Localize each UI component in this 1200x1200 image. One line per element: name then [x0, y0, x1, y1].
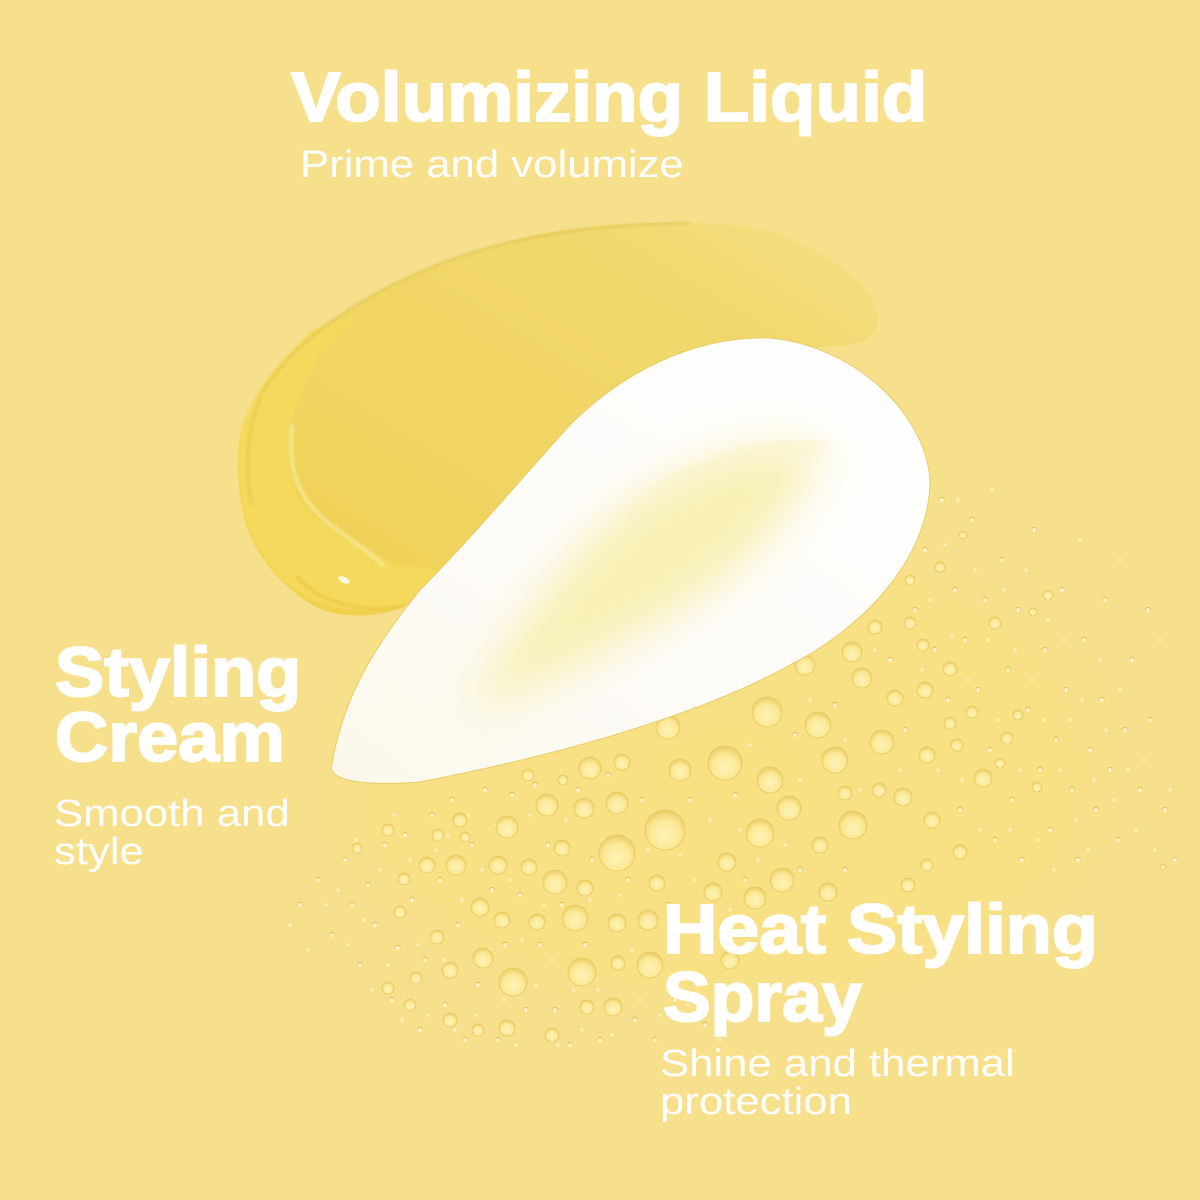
droplets [352, 531, 1166, 1042]
text: styling cream: style [54, 831, 144, 873]
swatch: styling cream [331, 338, 930, 783]
heading: styling cream: Styling [55, 633, 301, 711]
heading: styling cream [55, 633, 301, 776]
heading: heat styling spray: Spray [663, 958, 862, 1036]
gel rim band [239, 315, 440, 610]
text: styling cream: Smooth and [54, 793, 290, 835]
heading: styling cream: Cream [55, 698, 285, 776]
swatch: volumizing liquid [238, 222, 877, 616]
text: heat styling spray: Shine and thermal [660, 1043, 1015, 1085]
title: volumizing liquid: Volumizing Liquid [291, 58, 927, 136]
text: heat styling spray [660, 1043, 1015, 1123]
spray mist [250, 485, 1190, 1055]
text: styling cream [54, 793, 290, 873]
tiny droplets [290, 490, 1175, 1045]
subtitle: volumizing liquid: Prime and volumize [300, 144, 684, 186]
heading: heat styling spray: Heat Styling [663, 890, 1098, 968]
heading: heat styling spray [663, 890, 1098, 1036]
text: heat styling spray: protection [660, 1081, 852, 1123]
